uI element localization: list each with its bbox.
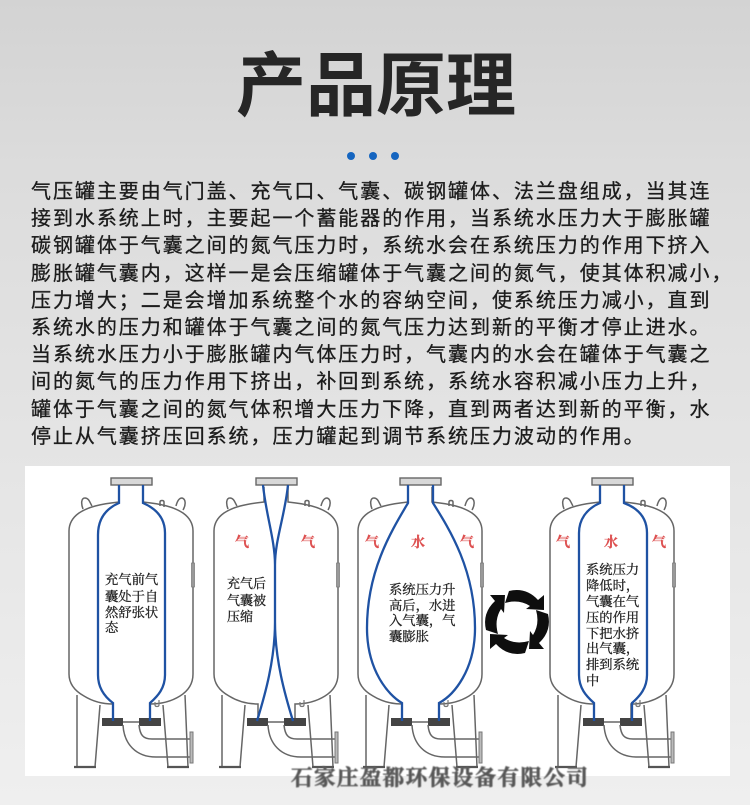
tank 4: water squeezed out: 降低时，	[586, 578, 639, 594]
text block: description: 系统水的压力和罐体于气囊之间的氮气压力达到新的平衡才停止进水。	[31, 317, 711, 339]
tank 4: water squeezed out: 系统压力	[586, 561, 639, 577]
tank 4: water squeezed out: 中	[586, 672, 599, 688]
text block: description: 碳钢罐体于气囊之间的氮气压力时，系统水会在系统压力的作用下挤入	[31, 235, 711, 257]
tank 4: water squeezed out: 压的作用	[586, 610, 639, 625]
text block: description: 膨胀罐气囊内，这样一是会压缩罐体于气囊之间的氮气，使其体积减小，	[31, 263, 733, 285]
watermark: company name: 石家庄盈都环保设备有限公司	[291, 766, 589, 790]
tank 2: after charging: 气	[301, 534, 315, 551]
tank 1: before charging: 态	[105, 620, 119, 635]
text block: description: 停止从气囊挤压回系统，压力罐起到调节系统压力波动的作用。	[31, 426, 646, 448]
tank 2: after charging: 充气后	[227, 576, 266, 591]
tank 3: water enters bladder: 高后，水进	[389, 597, 455, 614]
tank 2: after charging	[214, 478, 340, 767]
tank 4: water squeezed out: 气	[652, 534, 666, 551]
tank 4: water squeezed out: 水	[604, 535, 618, 551]
tank 4: water squeezed out	[550, 478, 676, 767]
tank 1: before charging	[69, 478, 194, 767]
text block: description: 罐体于气囊之间的氮气体积增大压力下降，直到两者达到新的平衡，水	[31, 399, 711, 421]
tank 3: water enters bladder: 囊膨胀	[389, 628, 429, 644]
tank 4: water squeezed out: 气囊在气	[586, 593, 639, 609]
tank 3: water enters bladder: 气	[365, 534, 379, 551]
tank 2: after charging: 气囊被	[227, 593, 266, 608]
tank 3: water enters bladder	[358, 478, 484, 767]
text block: description	[31, 180, 733, 448]
title: 产品原理	[236, 47, 516, 125]
tank 2: after charging: 气	[235, 534, 249, 551]
icon: cycle arrows	[485, 590, 549, 654]
text block: description: 当系统水压力小于膨胀罐内气体压力时，气囊内的水会在罐体于气囊之	[31, 344, 711, 366]
decorative three dots	[347, 152, 399, 160]
tank 1: before charging: 充气前气	[105, 572, 158, 587]
tank 1: before charging: 然舒张状	[105, 605, 158, 620]
tank 3: water enters bladder: 气	[460, 534, 474, 551]
tank 3: water enters bladder: 入气囊，气	[389, 612, 455, 629]
tank 1: before charging: 囊处于自	[105, 588, 158, 604]
tank 3: water enters bladder: 系统压力升	[389, 581, 455, 597]
tank 4: water squeezed out: 下把水挤	[586, 625, 639, 641]
text block: description: 间的氮气的压力作用下挤出，补回到系统，系统水容积减小压力上升，	[31, 371, 711, 393]
tank 3: water enters bladder: 水	[411, 535, 425, 551]
text block: description: 压力增大；二是会增加系统整个水的容纳空间，使系统压力减小，直到	[31, 290, 711, 312]
text block: description: 接到水系统上时，主要起一个蓄能器的作用，当系统水压力大于膨胀罐	[31, 208, 711, 230]
text block: description: 气压罐主要由气门盖、充气口、气囊、碳钢罐体、法兰盘组成，当其连	[31, 181, 711, 203]
tank 2: after charging: 压缩	[227, 609, 253, 624]
tank 4: water squeezed out: 气	[556, 534, 570, 551]
tank 4: water squeezed out: 排到系统	[586, 656, 640, 672]
tank 4: water squeezed out: 出气囊，	[586, 640, 639, 657]
panel: tank diagram background	[25, 466, 730, 776]
